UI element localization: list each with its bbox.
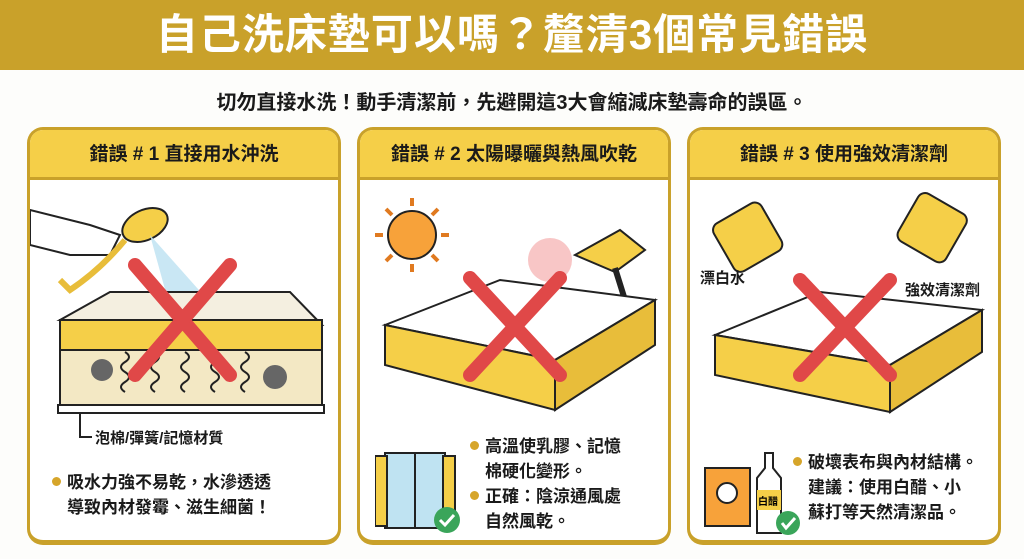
heading 3: 錯誤 # 3 使用強效清潔劑 [740, 144, 948, 165]
heading 1: 錯誤 # 1 直接用水沖洗 [90, 144, 278, 165]
heading 3 [690, 130, 998, 180]
illustration: bleach bottles and damaged mattress: 漂白水 [700, 269, 745, 287]
text block 3: 破壞表布與內材結構。 [808, 453, 978, 472]
label: materials: 泡棉/彈簧/記憶材質 [95, 430, 223, 447]
heading 2: 錯誤 # 2 太陽曝曬與熱風吹乾 [391, 144, 637, 165]
icon: baking soda and vinegar: 白醋 [758, 495, 778, 508]
panel: mistake 2 [357, 127, 671, 545]
heading 1 [30, 130, 338, 180]
text block 3: 蘇打等天然清潔品。 [808, 503, 961, 522]
icon: window with check [375, 452, 460, 533]
illustration: bleach bottles and damaged mattress [700, 192, 985, 414]
title: 自己洗床墊可以嗎？釐清3個常見錯誤 [156, 11, 868, 58]
text block 3 [793, 453, 978, 522]
text block 1 [52, 473, 271, 517]
text block 2 [470, 437, 621, 531]
text block 2: 正確：陰涼通風處 [485, 487, 621, 506]
illustration: bleach bottles and damaged mattress: 強效清潔劑 [905, 281, 980, 299]
text block 2: 棉硬化變形。 [485, 462, 587, 481]
text block 3: 建議：使用白醋、小 [808, 478, 961, 497]
subtitle: 切勿直接水洗！動手清潔前，先避開這3大會縮減床墊壽命的誤區。 [216, 92, 808, 114]
title [0, 0, 1024, 70]
text block 2: 高溫使乳膠、記憶 [485, 437, 621, 456]
icon: baking soda and vinegar [704, 452, 800, 535]
text block 1: 導致內材發霉、滋生細菌！ [67, 498, 271, 517]
panel: mistake 3 [687, 127, 1001, 545]
heading 2 [360, 130, 668, 180]
panel: mistake 1 [27, 127, 341, 545]
text block 1: 吸水力強不易乾，水滲透透 [67, 473, 271, 492]
text block 2: 自然風乾。 [485, 512, 570, 531]
illustration: sun, dryer, cracked mattress [375, 198, 658, 412]
illustration: mattress with water [30, 207, 325, 438]
